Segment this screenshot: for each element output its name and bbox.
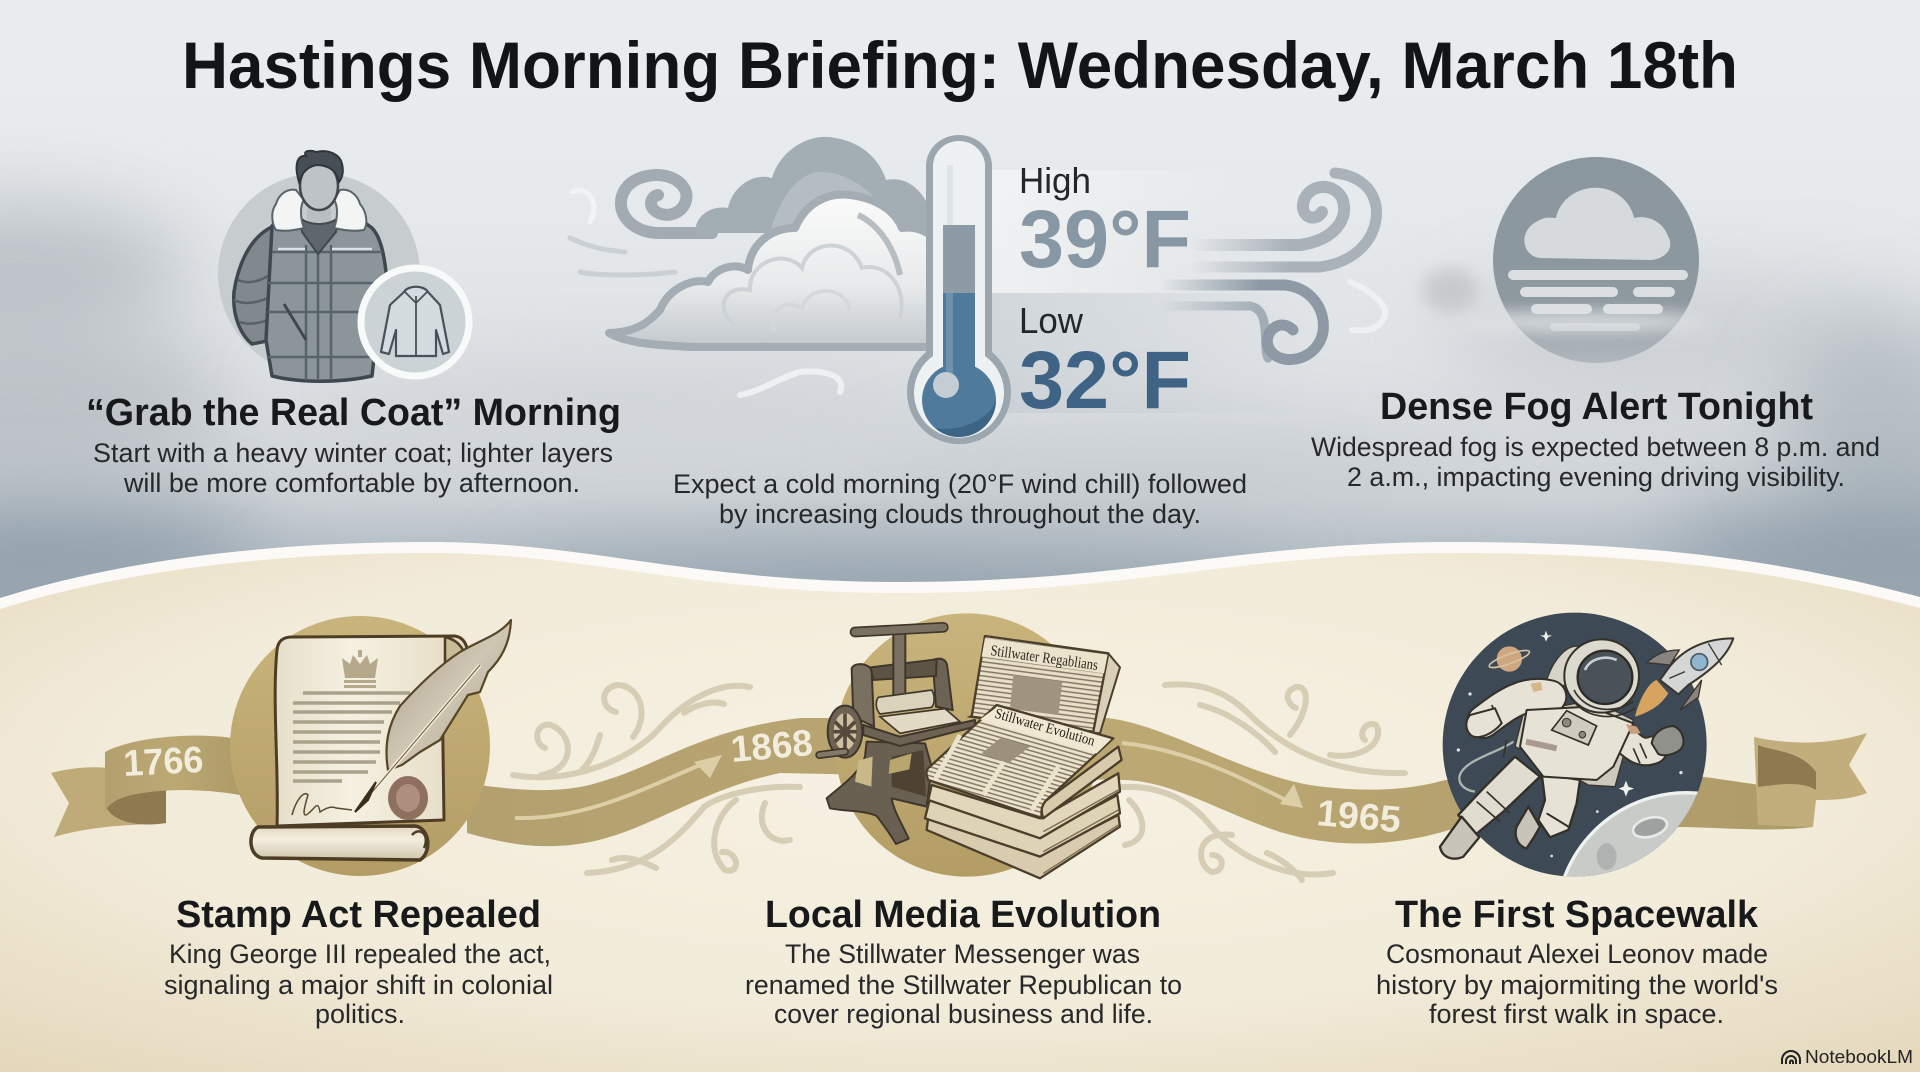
section: coat text: Start with a heavy winter coat; lighter layers bbox=[93, 438, 613, 468]
shoulder patches bbox=[1531, 682, 1543, 692]
torso bbox=[1520, 707, 1633, 780]
screw and handle bbox=[878, 630, 920, 697]
high temperature: 39°F bbox=[1019, 194, 1191, 285]
section: coat text bbox=[86, 392, 621, 498]
gloves bbox=[1466, 708, 1502, 737]
section: fog text: 2 a.m., impacting evening driving visibility. bbox=[1347, 462, 1845, 492]
scroll paper bbox=[275, 636, 468, 826]
rocket bbox=[1635, 680, 1668, 717]
icon: scroll and quill bbox=[230, 616, 511, 876]
quill feather bbox=[386, 620, 511, 770]
leg 1 bbox=[1458, 757, 1540, 835]
icon: astronaut and rocket bbox=[1438, 612, 1734, 877]
section: forecast text: by increasing clouds throughout the day. bbox=[719, 499, 1201, 529]
wax seal bbox=[388, 776, 428, 820]
wheel bbox=[828, 706, 862, 758]
section: coat text: “Grab the Real Coat” Morning bbox=[86, 392, 621, 434]
section: Stamp Act text bbox=[164, 894, 553, 1029]
low temperature: 32°F bbox=[1019, 335, 1191, 426]
section: Local Media text bbox=[745, 894, 1182, 1029]
planet bbox=[1497, 646, 1522, 672]
section: Stamp Act text: Stamp Act Repealed bbox=[176, 894, 541, 936]
decorative flourishes bbox=[513, 684, 1405, 880]
icon: printing press and newspapers bbox=[819, 613, 1122, 878]
section: Local Media text: renamed the Stillwater Republican to bbox=[745, 970, 1182, 1000]
press bed bbox=[880, 709, 960, 733]
right arm bbox=[1617, 733, 1653, 752]
section: Spacewalk text: history by majormiting the world's bbox=[1376, 970, 1778, 1000]
section: forecast text bbox=[673, 469, 1247, 529]
boots bbox=[1440, 817, 1479, 859]
icon: lighter jacket badge bbox=[361, 268, 469, 376]
section: Local Media text: cover regional business and life. bbox=[774, 999, 1153, 1029]
brand: NotebookLM: NotebookLM bbox=[1805, 1047, 1913, 1067]
icon: printing press and newspapers: Stillwater Evolution bbox=[993, 706, 1097, 750]
press frame bbox=[852, 664, 874, 727]
section: Local Media text: The Stillwater Messenger was bbox=[785, 939, 1140, 969]
back cloud bbox=[695, 137, 930, 233]
icon: right wind swirls bbox=[1150, 173, 1385, 360]
icon: clouds with wind swirls bbox=[570, 137, 940, 395]
year 1965: 1965 bbox=[1315, 792, 1403, 840]
text lines bbox=[293, 693, 410, 781]
moon bbox=[1563, 791, 1698, 876]
section: Spacewalk text: The First Spacewalk bbox=[1395, 894, 1759, 936]
neck and sweater bbox=[307, 198, 331, 222]
cloud lobes bbox=[724, 245, 902, 325]
section: Spacewalk text bbox=[1376, 894, 1778, 1029]
backpack bbox=[1547, 646, 1580, 687]
background: foggy sky bbox=[0, 0, 1920, 620]
left wind swirl bbox=[621, 175, 712, 233]
bottom roll bbox=[251, 826, 428, 860]
icon: man in winter coat bbox=[218, 151, 420, 381]
section: fog text: Widespread fog is expected between 8 p.m. and bbox=[1311, 432, 1880, 462]
icon: printing press and newspapers: Stillwater Regablians bbox=[989, 642, 1099, 674]
ribbon: left banner bbox=[105, 736, 240, 812]
ribbon: right banner bbox=[1754, 733, 1867, 827]
ribbon: main band bbox=[467, 718, 1813, 846]
background: parchment lower section with white wave edge bbox=[0, 542, 1920, 1072]
section: forecast text: Expect a cold morning (20°F wind chill) followed bbox=[673, 469, 1247, 499]
head bbox=[300, 162, 338, 210]
ribbon: left tail bbox=[51, 767, 166, 837]
year 1868: 1868 bbox=[729, 722, 814, 770]
helmet bbox=[1564, 639, 1639, 713]
stars bbox=[1540, 631, 1634, 797]
crown bbox=[342, 650, 378, 688]
arrow 2 bbox=[1122, 743, 1290, 802]
leg 2 bbox=[1538, 773, 1580, 837]
section: fog text: Dense Fog Alert Tonight bbox=[1380, 386, 1813, 428]
section: fog text bbox=[1311, 386, 1880, 492]
tether bbox=[1459, 742, 1513, 792]
paper stack bbox=[927, 815, 1120, 878]
section: Stamp Act text: signaling a major shift in colonial bbox=[164, 970, 553, 1000]
high temperature: High bbox=[1019, 160, 1091, 201]
front newspaper bbox=[1042, 747, 1122, 818]
coat body bbox=[266, 208, 388, 381]
section: Spacewalk text: forest first walk in space. bbox=[1429, 999, 1724, 1029]
year 1766: 1766 bbox=[122, 739, 204, 784]
section: Spacewalk text: Cosmonaut Alexei Leonov made bbox=[1386, 939, 1768, 969]
roller bbox=[876, 690, 934, 714]
left sleeve bbox=[234, 226, 284, 344]
back newspaper bbox=[970, 653, 1120, 733]
left arm bbox=[1483, 695, 1550, 722]
ribbon timeline bbox=[51, 718, 1867, 846]
icon: fog badge bbox=[1422, 157, 1710, 363]
section: Local Media text: Local Media Evolution bbox=[765, 894, 1161, 936]
icon: thermometer bbox=[907, 135, 1332, 444]
low temperature: Low bbox=[1019, 300, 1084, 341]
front cloud bbox=[609, 195, 940, 347]
title: Hastings Morning Briefing: Wednesday, March 18th bbox=[182, 28, 1738, 102]
section: coat text: will be more comfortable by afternoon. bbox=[123, 468, 580, 498]
section: Stamp Act text: politics. bbox=[315, 999, 405, 1029]
fur collar bbox=[272, 190, 304, 231]
arrow 1 bbox=[515, 760, 712, 818]
section: Stamp Act text: King George III repealed the act, bbox=[169, 939, 551, 969]
press legs bbox=[827, 742, 932, 844]
signature bbox=[292, 794, 352, 815]
